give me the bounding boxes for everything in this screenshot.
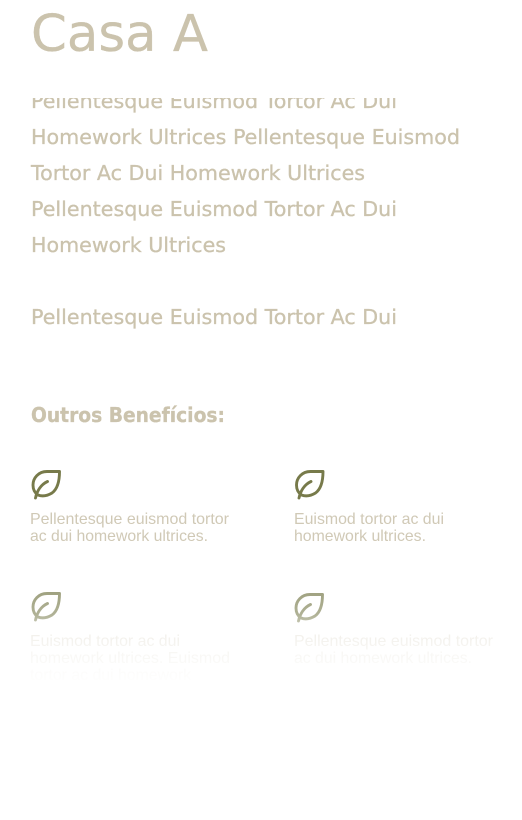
icon: leaf [33,472,60,498]
benefit 4: Pellentesque euismod tortor [294,633,494,650]
text block: description [30,89,460,329]
benefit 3: Euismod tortor ac dui [30,633,180,650]
title: Casa A [31,5,208,64]
benefit 2: Euismod tortor ac dui [294,511,444,528]
icon: leaf [33,594,60,620]
benefit 1 [30,472,230,545]
benefit 2: homework ultrices. [294,528,426,545]
text block: description: Homework Ultrices Pellentesque Euismod [31,125,460,149]
benefit 3: tortor ac dui homework [30,667,192,684]
text block: description: Homework Ultrices [31,233,226,257]
benefit 1: Pellentesque euismod tortor [30,511,230,528]
icon: leaf [296,594,322,621]
text block: description: Pellentesque Euismod Tortor Ac Dui [31,89,397,113]
icon: leaf [296,472,323,498]
benefit 4 [294,594,494,667]
text block: description: Tortor Ac Dui Homework Ultrices [30,161,365,185]
text block: description: Pellentesque Euismod Tortor Ac Dui [31,305,397,329]
benefit 1: ac dui homework ultrices. [30,528,208,545]
benefit 3 [30,594,230,684]
text block: description: Pellentesque Euismod Tortor Ac Dui [31,197,397,221]
benefit 4: ac dui homework ultrices. [294,650,472,667]
heading: outros beneficios: Outros Benefícios: [31,403,225,427]
benefit 2 [294,472,444,545]
benefit 3: homework ultrices. Euismod [30,650,230,667]
